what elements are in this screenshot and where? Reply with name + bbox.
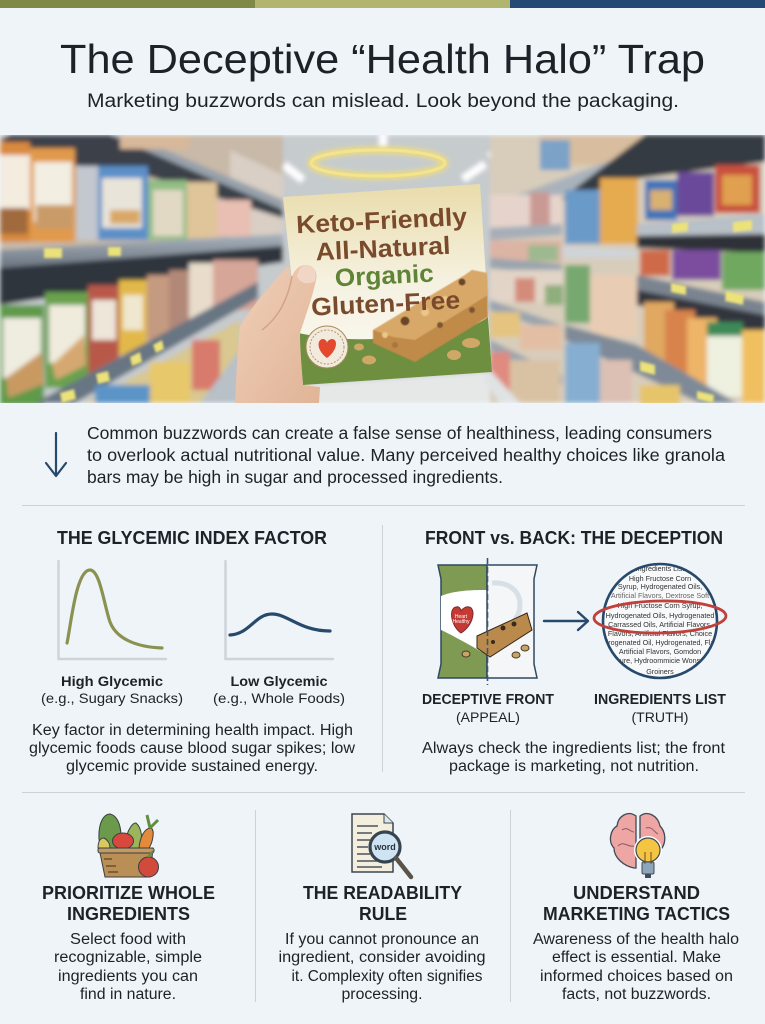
box claims: Gluten-Free bbox=[311, 286, 461, 322]
icon: document and magnifier bbox=[352, 814, 411, 877]
box claims: Keto-Friendly bbox=[296, 203, 468, 239]
body text: package is marketing, not nutrition. bbox=[449, 758, 699, 775]
label: low glycemic: Low Glycemic bbox=[230, 673, 328, 689]
label: deceptive front: DECEPTIVE FRONT bbox=[422, 692, 554, 708]
label: ingredients list: INGREDIENTS LIST bbox=[594, 692, 726, 708]
hand bbox=[235, 265, 320, 403]
icon: half wrapper, front and back bbox=[438, 558, 537, 685]
label: ingredients list bbox=[594, 692, 726, 725]
icon: magnified ingredients list: High Fructose Corn Syrup, bbox=[617, 601, 703, 610]
body text: ingredients you can bbox=[58, 968, 198, 985]
body text bbox=[54, 931, 202, 1003]
intro paragraph: bars may be high in sugar and processed ingredients. bbox=[87, 467, 503, 487]
panel: prioritize whole ingredients bbox=[42, 814, 215, 1003]
heading: THE GLYCEMIC INDEX FACTOR bbox=[57, 528, 327, 548]
body text: glycemic provide sustained energy. bbox=[66, 758, 318, 775]
aisle background bbox=[0, 135, 765, 405]
body text bbox=[422, 740, 726, 775]
halo bbox=[311, 150, 445, 176]
box claims: All-Natural bbox=[315, 232, 451, 266]
label: ingredients list: (TRUTH) bbox=[632, 709, 688, 725]
body text: glycemic foods cause blood sugar spikes; low bbox=[29, 740, 356, 757]
body text bbox=[533, 931, 739, 1003]
body text bbox=[278, 931, 486, 1003]
body text: If you cannot pronounce an bbox=[285, 931, 479, 948]
icon: magnified ingredients list: Syrup, Hydrogenated Oils, bbox=[618, 582, 702, 591]
icon: magnified ingredients list: Artificial Flavors, Gomdon bbox=[619, 647, 701, 656]
label: deceptive front bbox=[422, 692, 554, 725]
oats bbox=[354, 338, 480, 364]
label: low glycemic: (e.g., Whole Foods) bbox=[213, 690, 345, 706]
title: The Deceptive “Health Halo” Trap bbox=[60, 36, 705, 82]
heading: THE READABILITY bbox=[303, 883, 462, 903]
box claims bbox=[298, 208, 466, 316]
body text: effect is essential. Make bbox=[552, 949, 721, 966]
icon: brain and light bulb bbox=[610, 814, 665, 878]
label: high glycemic: (e.g., Sugary Snacks) bbox=[41, 690, 183, 706]
icon: magnified ingredients list bbox=[594, 564, 726, 678]
icon: down arrow bbox=[46, 433, 66, 476]
body text: find in nature. bbox=[80, 986, 176, 1003]
icon: magnified ingredients list: High Fructose Corn bbox=[629, 574, 691, 583]
intro paragraph bbox=[87, 423, 725, 487]
heading bbox=[42, 883, 215, 924]
top colour band bbox=[0, 0, 765, 8]
label: deceptive front: (APPEAL) bbox=[456, 709, 520, 725]
chart: high glycemic curve bbox=[58, 561, 166, 659]
heading: UNDERSTAND bbox=[573, 883, 700, 903]
body text: facts, not buzzwords. bbox=[562, 986, 711, 1003]
body text: recognizable, simple bbox=[54, 949, 202, 966]
heading: INGREDIENTS bbox=[67, 904, 190, 924]
body text: informed choices based on bbox=[540, 968, 733, 985]
icon: magnified ingredients list: Ingredients List bbox=[636, 564, 684, 573]
heading bbox=[543, 883, 730, 924]
photo: supermarket aisle with hand holding granola bar box bbox=[0, 135, 765, 405]
heading bbox=[303, 883, 462, 924]
panel: understand marketing tactics bbox=[533, 814, 739, 1003]
body text: Awareness of the health halo bbox=[533, 931, 739, 948]
heading: RULE bbox=[359, 904, 407, 924]
icon: magnified ingredients list: Artificial Flavors, Dextrose Soft bbox=[611, 591, 709, 600]
body text: processing. bbox=[342, 986, 422, 1003]
intro paragraph: Common buzzwords can create a false sense of healthiness, leading consumers bbox=[87, 423, 712, 443]
icon: magnified ingredients list: Groiners bbox=[646, 667, 674, 676]
body text: Always check the ingredients list; the front bbox=[422, 740, 726, 757]
arrow bbox=[544, 612, 588, 630]
shelf price tags bbox=[44, 220, 752, 403]
label: low glycemic bbox=[213, 673, 345, 706]
panel: front vs back bbox=[422, 528, 726, 775]
subtitle: Marketing buzzwords can mislead. Look beyond the packaging. bbox=[87, 91, 679, 112]
heading: MARKETING TACTICS bbox=[543, 904, 730, 924]
right shelves bbox=[490, 135, 765, 403]
body text: Select food with bbox=[70, 931, 186, 948]
icon: magnified ingredients list: Carrassed Oils, Artificial Flavors, bbox=[608, 620, 712, 629]
body text: it. Complexity often signifies bbox=[292, 968, 483, 985]
intro paragraph: to overlook actual nutritional value. Many perceived healthy choices like granola bbox=[87, 445, 725, 465]
icon: magnified ingredients list: Flavors, Artificial Flavors, Choice bbox=[608, 629, 712, 638]
body text: ingredient, consider avoiding bbox=[278, 949, 486, 966]
icon: half wrapper, front and back: Healthy bbox=[453, 619, 470, 625]
chart: low glycemic curve bbox=[226, 561, 333, 659]
granola bar bbox=[373, 270, 488, 362]
label: high glycemic: High Glycemic bbox=[61, 673, 163, 689]
icon: magnified ingredients list: Hydrogenated Oils, Hydrogenated bbox=[606, 611, 714, 620]
seal with heart bbox=[306, 326, 348, 368]
heading: FRONT vs. BACK: THE DECEPTION bbox=[425, 528, 723, 548]
icon: magnified ingredients list: Hydrogenated Oil, Hydrogenated, Flavor bbox=[595, 638, 725, 647]
icon: document and magnifier: word bbox=[373, 842, 396, 852]
granola bar box bbox=[283, 184, 492, 385]
icon: magnified ingredients list: ure, Hydroommicie Wons bbox=[620, 656, 701, 665]
body text bbox=[29, 722, 356, 775]
icon: half wrapper, front and back: Heart bbox=[455, 614, 468, 620]
box claims: Organic bbox=[334, 260, 435, 292]
panel: glycemic index bbox=[29, 528, 356, 775]
panel: readability rule bbox=[278, 814, 486, 1003]
left shelves bbox=[0, 135, 283, 250]
heading: PRIORITIZE WHOLE bbox=[42, 883, 215, 903]
body text: Key factor in determining health impact. High bbox=[32, 722, 353, 739]
icon: vegetable basket bbox=[98, 814, 158, 877]
label: high glycemic bbox=[41, 673, 183, 706]
